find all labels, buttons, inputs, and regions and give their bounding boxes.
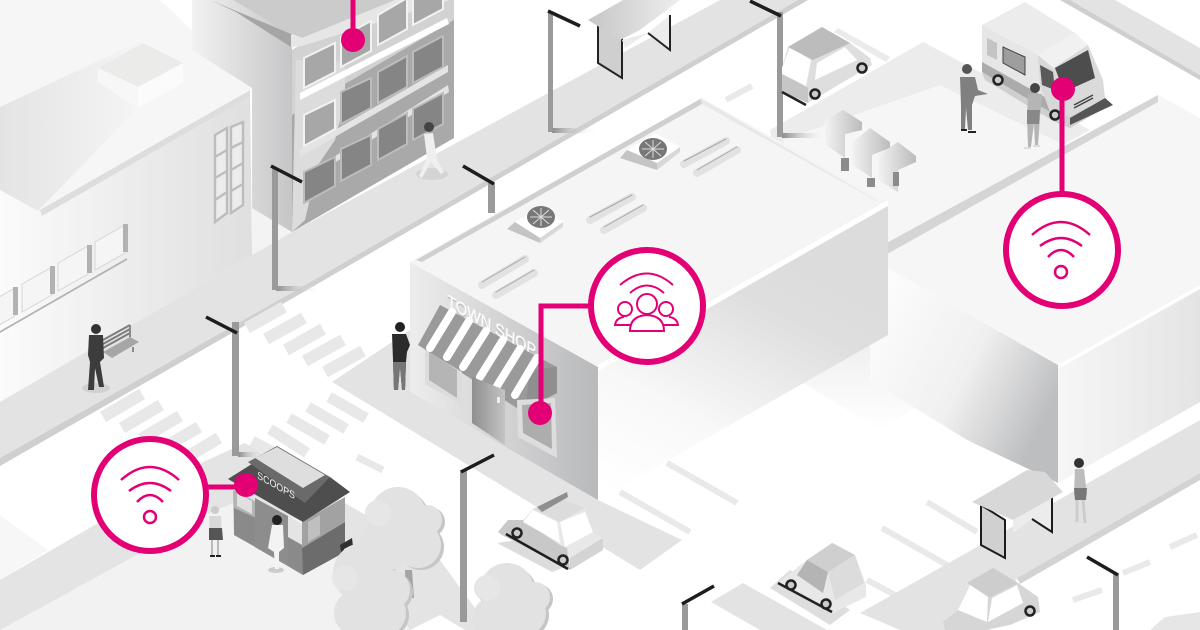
front wall xyxy=(410,262,598,500)
roof xyxy=(410,98,888,367)
trees xyxy=(332,487,553,630)
callout stem: top building xyxy=(341,0,365,52)
icon: wifi xyxy=(121,467,179,523)
tall windows xyxy=(215,122,243,222)
man with bench xyxy=(82,324,110,393)
door xyxy=(472,377,505,445)
bus shelter top xyxy=(588,0,680,78)
strip windows xyxy=(0,225,125,333)
roof overhang xyxy=(210,0,291,47)
callout: shop crowd xyxy=(528,250,703,425)
woman right xyxy=(1074,458,1087,523)
lower-left plaza xyxy=(0,443,500,630)
tree trunk xyxy=(405,570,414,598)
people near truck xyxy=(960,64,988,132)
street lamps xyxy=(238,128,828,457)
rooftop box xyxy=(98,43,183,108)
upper sidewalk xyxy=(0,0,798,458)
crosswalks xyxy=(103,307,383,470)
light facade band xyxy=(292,60,345,232)
icon: wifi xyxy=(1032,222,1090,278)
right building xyxy=(870,95,1200,483)
right window xyxy=(517,398,557,458)
kiosk SCOOPS xyxy=(228,446,355,575)
right wall xyxy=(598,202,888,500)
shop sign: TOWN SHOP xyxy=(447,291,537,361)
left window xyxy=(425,350,462,405)
roof vents xyxy=(482,133,737,295)
road dashes xyxy=(405,86,1197,603)
ground shade right of shop xyxy=(803,335,960,430)
person by shop xyxy=(392,322,410,390)
icon: people with signal xyxy=(615,274,678,331)
main building xyxy=(410,98,888,500)
left building wall xyxy=(0,90,252,402)
centre-top building xyxy=(192,0,454,232)
shop sidewalk xyxy=(332,330,682,570)
taxi xyxy=(497,492,603,572)
walking woman xyxy=(416,122,448,180)
bus shelter right xyxy=(972,470,1063,558)
kiosk sign: SCOOPS xyxy=(257,470,295,502)
window rows xyxy=(304,0,443,88)
car top xyxy=(782,27,872,105)
women by kiosk xyxy=(209,506,223,556)
mailboxes xyxy=(825,110,916,192)
car lower middle xyxy=(770,543,866,625)
callout: food truck wifi xyxy=(1006,77,1118,306)
left building roof xyxy=(0,0,252,212)
bench xyxy=(103,325,139,358)
car lower right xyxy=(943,568,1040,630)
top right sidewalk block xyxy=(770,0,1200,245)
window bands xyxy=(300,18,449,100)
food truck xyxy=(982,2,1113,128)
awning xyxy=(418,305,557,410)
lower right sidewalk xyxy=(711,420,1200,630)
callout: scoops wifi xyxy=(94,439,258,551)
shop sign: TOWN SHOP xyxy=(447,293,537,363)
